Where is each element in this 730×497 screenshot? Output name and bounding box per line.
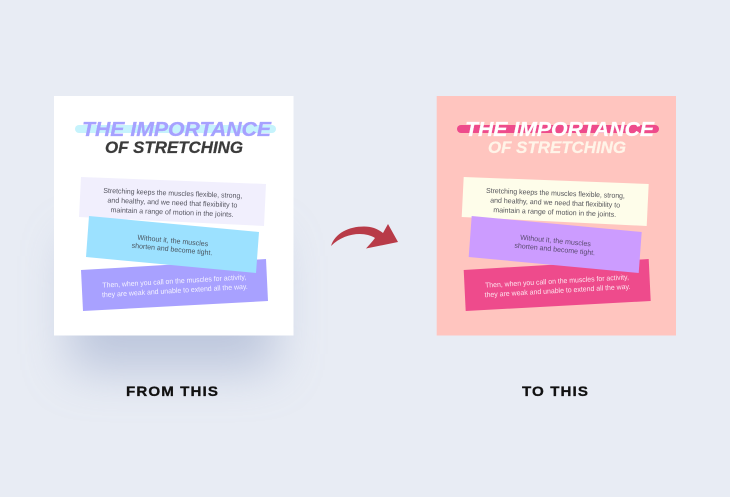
text box: muscles shorten: Without it, the muscles [520, 233, 592, 248]
heading: of stretching: OF STRETCHING [105, 138, 243, 157]
text box: flexibility: maintain a range of motion in the joints. [493, 205, 616, 219]
title highlight pill [75, 125, 276, 133]
heading: the importance: THE IMPORTANCE [82, 119, 272, 141]
arrow [331, 224, 398, 248]
text box: weak muscles: Then, when you call on the muscles for activity, [485, 272, 629, 290]
text box: weak muscles: they are weak and unable to extend all the way. [102, 282, 248, 299]
card shadow [70, 240, 275, 370]
heading: the importance: THE IMPORTANCE [465, 119, 655, 141]
text box: muscles shorten: Without it, the muscles [137, 233, 209, 248]
text box: flexibility: and healthy, and we need that flexibility to [107, 196, 238, 209]
text box: flexibility: maintain a range of motion in the joints. [110, 205, 234, 219]
panel: to this design [437, 96, 676, 336]
text box: muscles shorten: shorten and become tight. [131, 241, 213, 257]
text box: flexibility: and healthy, and we need that flexibility to [490, 196, 620, 209]
heading: of stretching: OF STRETCHING [488, 138, 626, 157]
label: from this: FROM THIS [126, 383, 219, 399]
text box: muscles shorten [86, 216, 259, 273]
text box: flexibility [462, 177, 649, 226]
title highlight pill [457, 125, 659, 133]
text box: flexibility: Stretching keeps the muscles flexible, strong, [486, 186, 625, 200]
text box: flexibility: Stretching keeps the muscles flexible, strong, [103, 186, 242, 200]
text box: weak muscles [81, 259, 268, 311]
text box: weak muscles: they are weak and unable to extend all the way. [484, 282, 631, 299]
text box: flexibility [79, 177, 266, 226]
panel: from this design [54, 96, 294, 336]
text box: muscles shorten [469, 216, 642, 273]
text box: weak muscles [464, 259, 651, 311]
label: to this: TO THIS [522, 383, 589, 399]
text box: weak muscles: Then, when you call on the muscles for activity, [102, 272, 246, 290]
text box: muscles shorten: shorten and become tight. [514, 241, 596, 257]
